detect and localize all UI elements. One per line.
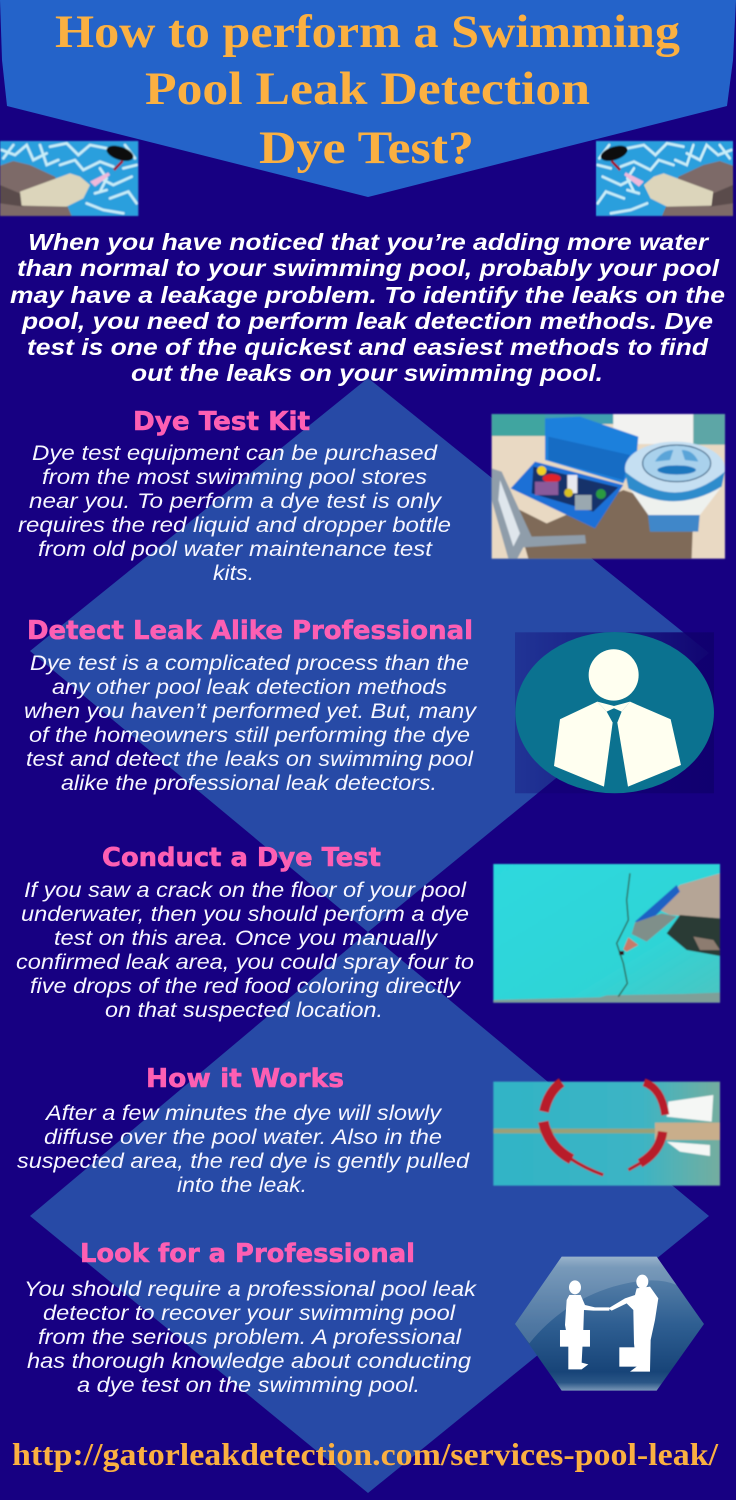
intro paragraph: may have a leakage problem. To identify the leaks on the xyxy=(10,282,725,308)
text: look for a professional: detector to recover your swimming pool xyxy=(43,1302,456,1325)
text: how it works: into the leak. xyxy=(177,1174,307,1197)
text: conduct a dye test: five drops of the red food coloring directly xyxy=(30,975,462,998)
panel: look for a professional xyxy=(24,1239,704,1397)
text: conduct a dye test: confirmed leak area, you could spray four to xyxy=(16,951,474,974)
header banner xyxy=(0,0,736,197)
panel: conduct a dye test xyxy=(16,843,720,1022)
intro paragraph: When you have noticed that you’re adding more water xyxy=(28,229,709,255)
text: dye test kit: requires the red liquid and dropper bottle xyxy=(18,514,451,537)
text: look for a professional xyxy=(24,1278,478,1397)
title: Pool Leak Detection xyxy=(145,63,590,115)
text: detect leak: alike the professional leak detectors. xyxy=(61,772,437,795)
heading: conduct a dye test: Conduct a Dye Test xyxy=(102,843,381,873)
icon: handshake hexagon xyxy=(515,1257,704,1391)
text: conduct a dye test: If you saw a crack on the floor of your pool xyxy=(24,879,467,902)
text: dye test kit: near you. To perform a dye test is only xyxy=(29,490,443,513)
text: dye test kit: from the most swimming pool stores xyxy=(42,466,428,489)
text: look for a professional: a dye test on the swimming pool. xyxy=(77,1374,420,1397)
text: how it works: After a few minutes the dye will slowly xyxy=(44,1102,443,1125)
heading: dye test kit: Dye Test Kit xyxy=(133,407,310,437)
footer url: http://gatorleakdetection.com/services-pool-leak/ xyxy=(12,1436,719,1472)
photo: red dye ring in pool water xyxy=(493,1082,720,1186)
text: dye test kit: kits. xyxy=(213,562,254,585)
photo: test kit box and floater xyxy=(492,414,725,559)
text: detect leak: any other pool leak detection methods xyxy=(52,676,448,699)
title xyxy=(55,6,681,174)
intro paragraph: pool, you need to perform leak detection methods. Dye xyxy=(21,308,713,334)
panel: detect leak alike professional xyxy=(24,616,714,795)
text: conduct a dye test: underwater, then you should perform a dye xyxy=(21,903,469,926)
text: look for a professional: has thorough knowledge about conducting xyxy=(27,1350,471,1373)
background diamond: lower xyxy=(30,932,709,1493)
intro paragraph: than normal to your swimming pool, probably your pool xyxy=(17,255,720,281)
photo: dye bottle right xyxy=(596,141,733,216)
panel: dye test kit xyxy=(18,407,725,585)
title: How to perform a Swimming xyxy=(55,6,681,58)
text: detect leak: test and detect the leaks on swimming pool xyxy=(26,748,474,771)
photo: dye applied to pool crack xyxy=(493,864,720,1003)
intro paragraph: test is one of the quickest and easiest methods to find xyxy=(27,334,709,360)
text: detect leak: of the homeowners still performing the dye xyxy=(29,724,470,747)
text: how it works xyxy=(17,1102,470,1197)
panel: how it works xyxy=(17,1064,720,1197)
text: dye test kit: Dye test equipment can be purchased xyxy=(32,442,439,465)
text: how it works: diffuse over the pool water. Also in the xyxy=(44,1126,442,1149)
title: Dye Test? xyxy=(259,122,474,174)
text: conduct a dye test xyxy=(16,879,474,1022)
text: how it works: suspected area, the red dye is gently pulled xyxy=(17,1150,470,1173)
text: detect leak: Dye test is a complicated process than the xyxy=(30,652,469,675)
background diamond: upper xyxy=(30,378,709,932)
text: conduct a dye test: on that suspected location. xyxy=(105,999,383,1022)
heading: look for a professional: Look for a Professional xyxy=(80,1239,415,1269)
intro paragraph: out the leaks on your swimming pool. xyxy=(131,360,603,386)
text: dye test kit: from old pool water maintenance test xyxy=(38,538,433,561)
photo: dye bottle left xyxy=(0,141,138,216)
text: detect leak xyxy=(24,652,478,795)
text: detect leak: when you haven’t performed yet. But, many xyxy=(24,700,478,723)
text: look for a professional: You should require a professional pool leak xyxy=(24,1278,478,1301)
text: look for a professional: from the serious problem. A professional xyxy=(38,1326,462,1349)
heading: detect leak: Detect Leak Alike Professional xyxy=(27,616,473,646)
intro paragraph xyxy=(10,229,725,386)
heading: how it works: How it Works xyxy=(146,1064,344,1094)
text: conduct a dye test: test on this area. Once you manually xyxy=(54,927,439,950)
icon: professional in shirt and tie xyxy=(515,632,714,793)
text: dye test kit xyxy=(18,442,451,585)
